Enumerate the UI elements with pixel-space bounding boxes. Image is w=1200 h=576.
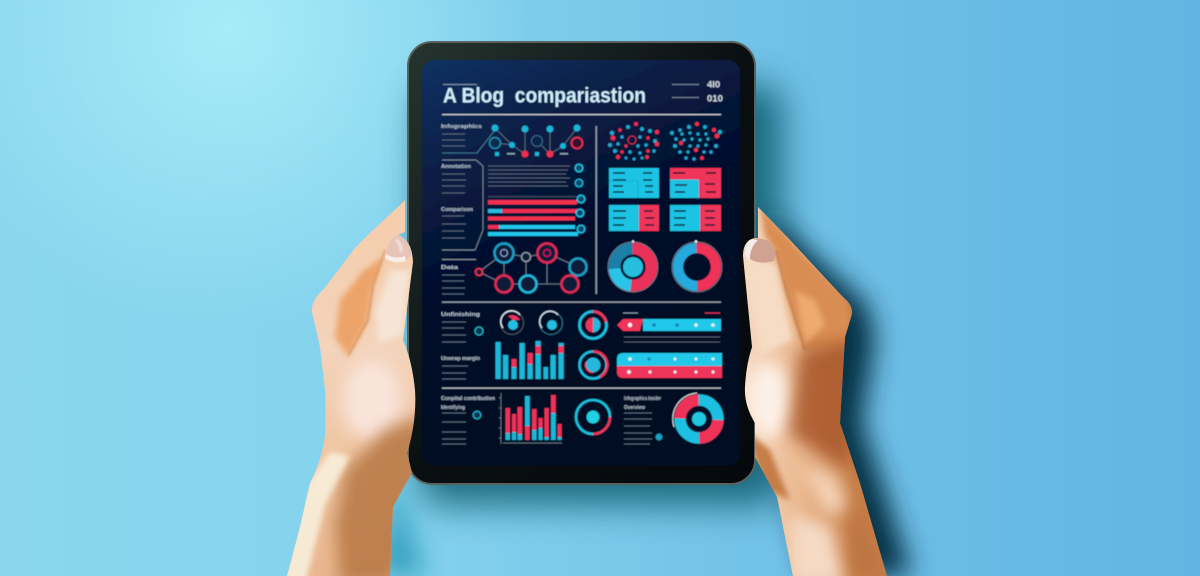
bar chart 2 [499,393,562,444]
header figures: 010 [707,94,723,104]
left hand shading [287,249,414,576]
node diagram: top [490,124,582,158]
middle text column: Unwrap margin [441,356,481,362]
left text column: Infographics [441,124,482,130]
bottom left text column: Identifying [441,405,465,411]
donut chart 1 [608,240,658,292]
header figures: 4I0 [707,80,720,90]
ring gauges [580,312,607,378]
bottom right text column [624,396,662,444]
right thumbnail [745,238,775,263]
table 1 [609,168,659,198]
network cluster right [670,122,722,161]
left text column [441,124,495,294]
middle text column: Unfinishing [441,312,481,318]
bottom right text column: Overview [624,405,645,411]
left hand [287,200,416,576]
ring gauge bottom [576,400,610,434]
table 3 [609,205,659,231]
banner list [617,313,722,378]
title: A Blog compariastion [443,84,646,108]
right hand [740,200,890,576]
bottom right text column: Infographics insider [624,396,661,402]
table 4 [670,205,721,231]
left text column: Comparison [441,207,474,213]
node diagram: bottom [476,244,586,292]
right hand shading [745,205,885,576]
tablet screen [422,60,740,466]
table 2 [670,168,721,198]
donut chart 3 [673,393,718,438]
left text column: Annotation [441,164,472,170]
small rings [500,311,562,334]
bottom left text column [441,396,495,444]
donut chart 2 [672,240,722,292]
bar chart 1 [496,341,564,379]
title rule [443,84,477,85]
header figures [672,80,723,104]
tablet bezel [408,42,755,484]
bottom left text column: Conpital contribution [441,396,495,402]
shadow: tablet and hands [378,85,912,576]
left thumbnail [384,236,412,262]
middle text column [441,312,483,379]
bar list [488,164,585,236]
tablet [408,42,755,484]
network cluster left [608,122,659,160]
left text column: Data [441,265,459,271]
